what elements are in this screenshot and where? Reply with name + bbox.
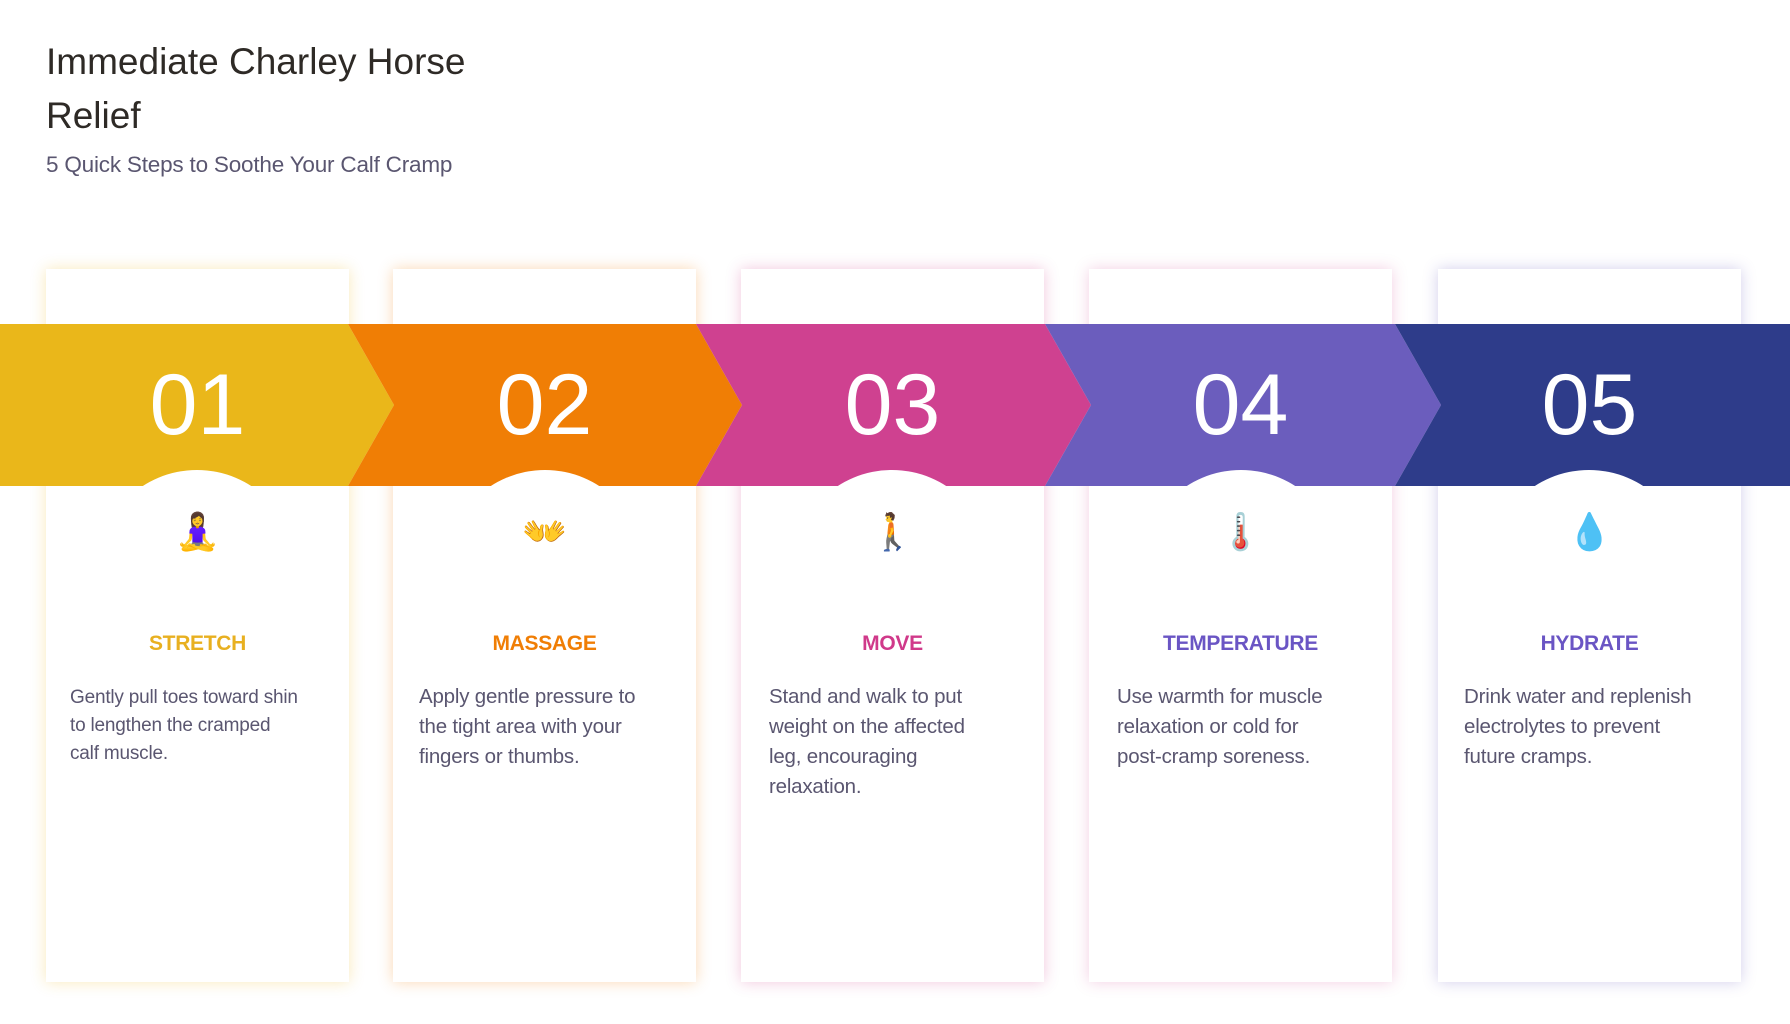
text: to lengthen the cramped [70,715,270,736]
text: Stand and walk to put [769,685,962,708]
icon: hands: 👐 [522,511,567,553]
card 1 [46,269,349,982]
text [1117,685,1322,768]
card 3 [741,269,1044,982]
title: Immediate Charley Horse Relief [46,41,465,136]
step 4 [1117,357,1322,768]
text: future cramps. [1464,745,1592,768]
card 4 [1089,269,1392,982]
text: Apply gentle pressure to [419,685,635,708]
text [769,685,965,798]
step 5 [1464,357,1691,768]
heading move: MOVE [862,632,923,655]
text: weight on the affected [769,715,965,738]
text: Gently pull toes toward shin [70,687,298,708]
text: calf muscle. [70,743,168,764]
card 2 [393,269,696,982]
subtitle: 5 Quick Steps to Soothe Your Calf Cramp [46,152,452,177]
number 05: 05 [1542,357,1637,453]
text: relaxation or cold for [1117,715,1298,738]
text: Use warmth for muscle [1117,685,1322,708]
number 04: 04 [1193,357,1288,453]
text [419,685,635,768]
number 03: 03 [845,357,940,453]
icon: water drop: 💧 [1567,511,1612,553]
number 02: 02 [497,357,592,453]
text [70,687,298,764]
step 1 [70,357,298,764]
icon: meditation: 🧘‍♀️ [175,511,220,553]
heading stretch: STRETCH [149,632,246,655]
text: electrolytes to prevent [1464,715,1660,738]
text [1464,685,1691,768]
icon: thermometer: 🌡️ [1218,511,1263,553]
text: post-cramp soreness. [1117,745,1310,768]
text: the tight area with your [419,715,622,738]
step 2 [419,357,635,768]
heading temperature: TEMPERATURE [1163,632,1318,655]
icon: walking: 🚶 [870,511,915,553]
text: fingers or thumbs. [419,745,579,768]
heading hydrate: HYDRATE [1541,632,1638,655]
text: Drink water and replenish [1464,685,1691,708]
text: relaxation. [769,775,861,798]
step 3 [769,357,965,798]
card 5 [1438,269,1741,982]
heading massage: MASSAGE [492,632,597,655]
number 01: 01 [150,357,245,453]
text: leg, encouraging [769,745,917,768]
